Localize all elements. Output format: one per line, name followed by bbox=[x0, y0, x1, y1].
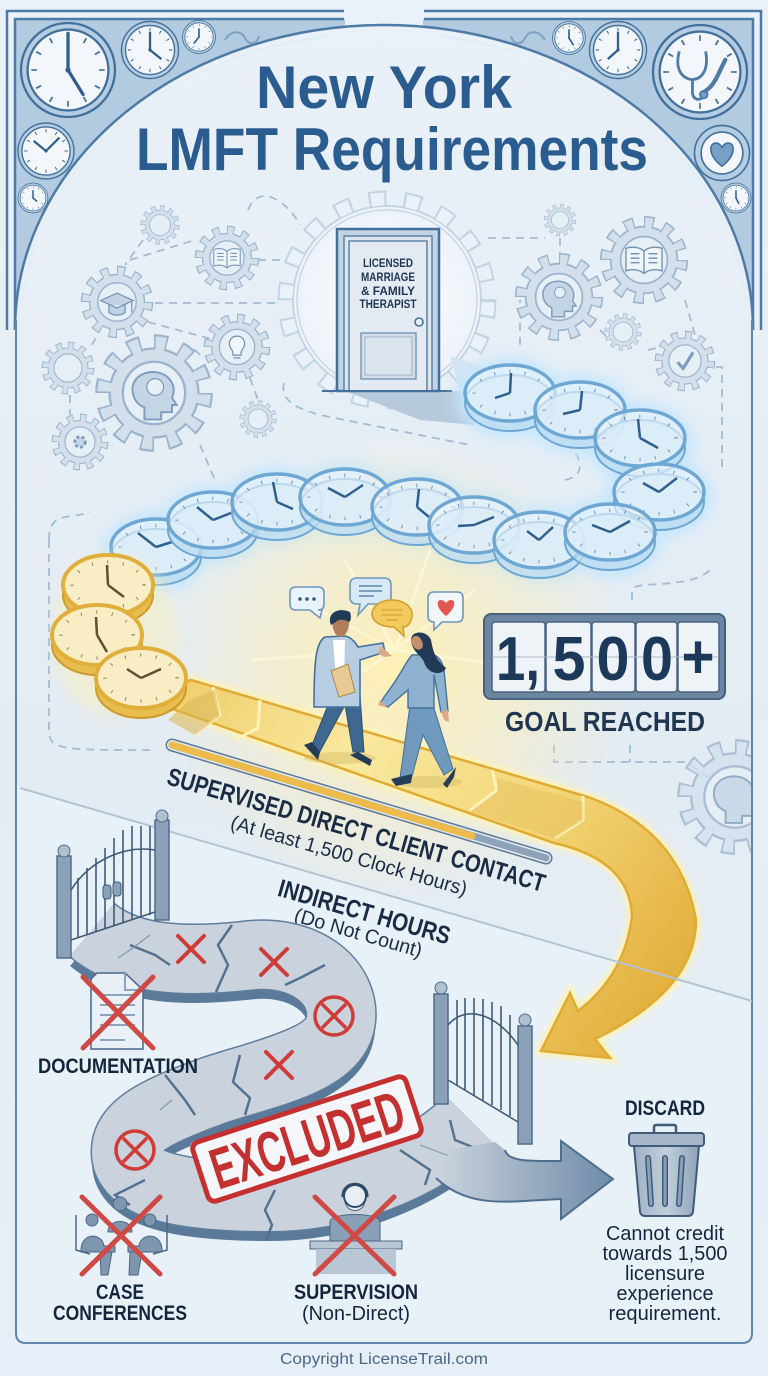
icon: stethoscope bbox=[678, 51, 725, 99]
title: LMFT Requirements bbox=[136, 116, 648, 183]
text: cannot credit note: Cannot credit bbox=[606, 1223, 724, 1245]
person: therapist bbox=[304, 610, 392, 766]
counter: 1,500+: 0 bbox=[641, 625, 673, 694]
counter: 1,500+: 0 bbox=[596, 625, 630, 694]
text: cannot credit note: requirement. bbox=[608, 1303, 722, 1325]
text: cannot credit note: towards 1,500 bbox=[602, 1243, 728, 1265]
gold road with arrow bbox=[147, 680, 696, 1058]
counter: 1,500+: 5 bbox=[552, 625, 586, 694]
door: Licensed Marriage & Family Therapist: & FAMILY bbox=[361, 284, 415, 298]
stamp: excluded: EXCLUDED bbox=[202, 1079, 413, 1202]
label: supervision (non-direct) bbox=[294, 1281, 418, 1325]
icon: graduation cap bbox=[101, 293, 133, 315]
gears: left cluster bbox=[45, 208, 274, 466]
label: documentation: DOCUMENTATION bbox=[38, 1055, 198, 1078]
icon: heart bbox=[711, 143, 733, 166]
label: case conferences bbox=[53, 1281, 187, 1325]
title: New York bbox=[256, 54, 513, 121]
speech bubbles bbox=[290, 578, 463, 636]
person: client bbox=[378, 632, 462, 788]
divider line bbox=[20, 788, 752, 1001]
text: cannot credit note: experience bbox=[616, 1283, 714, 1305]
counter: 1,500+: 1, bbox=[496, 625, 540, 694]
label: discard: DISCARD bbox=[625, 1097, 705, 1120]
red x marks on road bbox=[116, 936, 353, 1169]
label: supervision (non-direct): (Non-Direct) bbox=[302, 1303, 410, 1325]
copyright: Copyright LicenseTrail.com bbox=[280, 1351, 488, 1368]
icon: documentation crossed out bbox=[83, 973, 153, 1049]
gray arrow to discard bbox=[436, 1141, 613, 1219]
progress bar bbox=[172, 745, 546, 858]
text: cannot credit note: licensure bbox=[625, 1263, 705, 1285]
icon: light bulb bbox=[229, 336, 245, 358]
broken road bbox=[92, 925, 480, 1240]
icon: supervision crossed out bbox=[310, 1184, 402, 1274]
title bbox=[136, 54, 648, 183]
road chevrons bbox=[195, 687, 583, 838]
sunburst behind the people bbox=[160, 435, 630, 905]
door: Licensed Marriage & Family Therapist: THERAPIST bbox=[360, 297, 417, 311]
door: Licensed Marriage & Family Therapist: LICENSED bbox=[363, 256, 413, 270]
label: supervision (non-direct): SUPERVISION bbox=[294, 1281, 418, 1304]
label: supervised direct client contact: (At least 1,500 Clock Hours) bbox=[228, 812, 470, 901]
label: case conferences: CASE bbox=[96, 1281, 144, 1304]
big gear behind door bbox=[285, 198, 489, 402]
corner clocks: left bbox=[18, 20, 216, 213]
label: indirect hours: INDIRECT HOURS bbox=[275, 874, 454, 950]
label: supervised direct client contact: SUPERVISED DIRECT CLIENT CONTACT bbox=[164, 763, 548, 898]
door: Licensed Marriage & Family Therapist: MARRIAGE bbox=[361, 270, 415, 284]
icon: case conferences crossed out bbox=[76, 1197, 167, 1275]
label: indirect hours: (Do Not Count) bbox=[292, 905, 425, 962]
door: Licensed Marriage & Family Therapist bbox=[322, 229, 500, 425]
dashed connectors bbox=[49, 196, 722, 780]
clock chain: lower blue bbox=[111, 469, 655, 585]
corner clocks: right bbox=[552, 22, 751, 213]
left gate bbox=[57, 810, 169, 958]
icon: checkmark bbox=[678, 352, 693, 368]
heading: goal reached: GOAL REACHED bbox=[505, 706, 705, 737]
road cracks bbox=[115, 925, 480, 1240]
right gate bbox=[434, 982, 532, 1144]
text: cannot credit note bbox=[602, 1223, 728, 1325]
counter: 1,500+: + bbox=[682, 623, 714, 692]
gold clocks bbox=[52, 553, 186, 718]
clock chain: upper blue bbox=[465, 365, 704, 530]
stamp: excluded bbox=[188, 1072, 426, 1207]
glow under the clock chain bbox=[109, 365, 706, 585]
icon: trash can bbox=[629, 1125, 704, 1216]
label: case conferences: CONFERENCES bbox=[53, 1302, 187, 1325]
counter: 1,500+ bbox=[484, 614, 725, 699]
gears: right cluster bbox=[521, 206, 768, 880]
